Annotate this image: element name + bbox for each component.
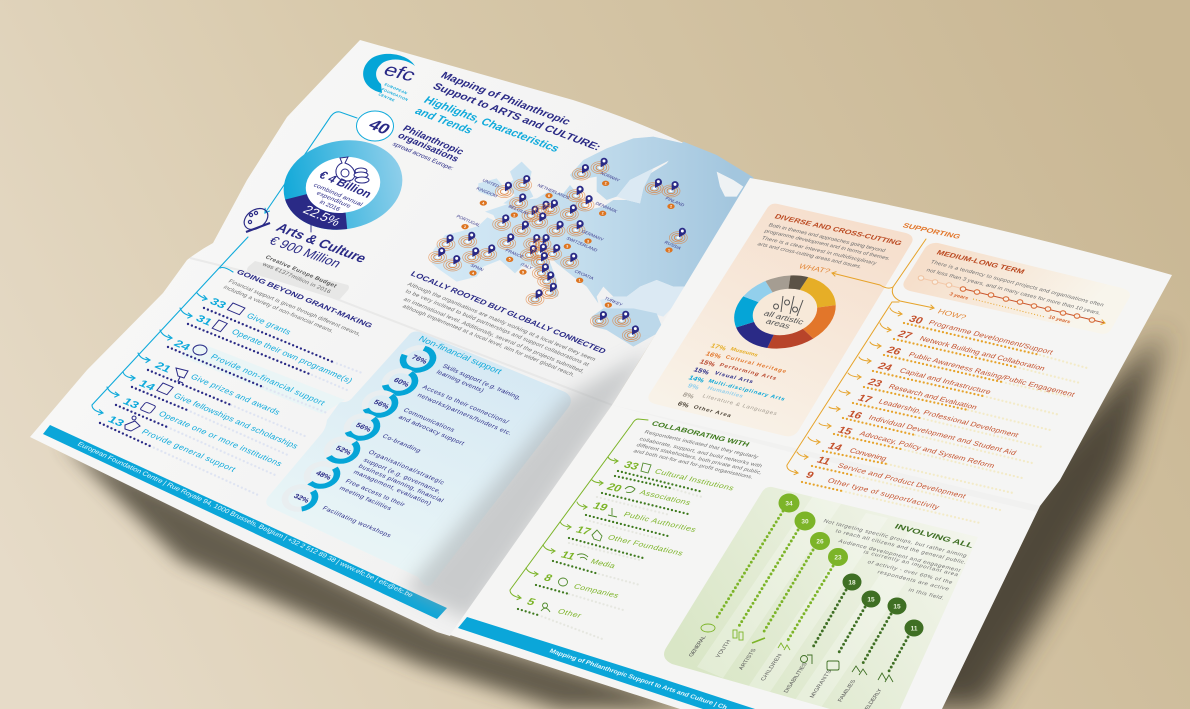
section: collaborating with: and both not-for and for-profit organisations.	[632, 449, 754, 481]
icon: sliders	[774, 296, 803, 316]
list item: 13 general support	[105, 414, 239, 474]
panel: involving all	[664, 487, 978, 709]
legend: artistic areas: Visual Arts	[713, 371, 754, 385]
stat: 40 organisations: organisations	[395, 131, 461, 164]
panel: non-financial support content: networks/partners/funders etc.	[416, 392, 513, 437]
panel: involving all: is currently an important area	[862, 550, 960, 578]
list: how items: Public Awareness Raising/Public Engagement	[907, 350, 1077, 399]
map country labels: CROATIA	[573, 269, 595, 281]
panel: involving all: of activity - over 60% of the	[866, 560, 953, 585]
map country labels: FINLAND	[664, 196, 686, 208]
icon: palette	[240, 204, 272, 234]
panel: non-financial support content: and advocacy support	[397, 414, 466, 447]
list: collaborating items: Media	[589, 557, 618, 570]
country count badges	[461, 181, 675, 308]
panel: non-financial support content: Organisational/strategic	[367, 449, 446, 486]
section: collaborating with: Respondents indicated that they regularly	[643, 430, 759, 460]
section: locally rooted: Although the organisations are mainly working at a local level they seem	[406, 282, 597, 363]
panel: non-financial support content: Non-financial support	[417, 334, 505, 376]
heading: supporting: SUPPORTING	[901, 221, 962, 241]
legend: artistic areas: Museums	[729, 347, 759, 358]
list: how items: 24	[875, 361, 895, 374]
section: locally rooted	[401, 270, 608, 378]
lollipop chart: audiences: 15	[893, 604, 901, 610]
list item: 13 institutions: 13	[120, 396, 141, 411]
list: collaborating items: Cultural Institutions	[653, 467, 736, 492]
donut: all artistic areas	[729, 274, 841, 350]
panel: non-financial support content: Communications	[402, 407, 456, 434]
panel: non-financial support content: Free access to their	[344, 478, 407, 508]
map country labels: FRANCE	[504, 248, 525, 259]
donut: 4 billion expenditure: € 4 Billion	[316, 169, 375, 200]
audience labels: MIGRANTS	[809, 670, 833, 698]
audience labels: YOUTH	[715, 640, 733, 658]
list: how items: Individual Development and Student Aid	[867, 413, 1018, 457]
list: collaborating items: 19	[590, 501, 610, 513]
lollipop chart: audiences: 34	[785, 500, 793, 508]
list: how items: Other type of support/activity	[826, 476, 941, 511]
stat: 40 organisations	[356, 111, 466, 172]
panel: medium-long term: 10 years	[1047, 315, 1071, 325]
list: how items: Programme Development/Support	[927, 318, 1056, 356]
stat: 40 organisations: Philanthropic	[400, 124, 466, 157]
small arrow	[310, 222, 312, 232]
legend: artistic areas: Humanities	[706, 386, 744, 399]
location pins	[429, 158, 687, 341]
map of europe: 2	[605, 182, 607, 186]
list item: 21 prizes	[152, 360, 282, 417]
panel: medium-long term: There is a tendency to support projects and organisations often	[929, 260, 1105, 308]
tinted strip behind list	[180, 343, 345, 414]
legend: artistic areas: 6%	[676, 400, 691, 409]
panel: involving all: Not targeting specific groups, but rather aiming	[822, 519, 968, 559]
legend: artistic areas: Other Area	[692, 405, 733, 419]
list: how items	[803, 314, 1077, 511]
map of europe: 2	[513, 213, 515, 217]
logo: efc: efc	[379, 60, 420, 86]
map of europe: 2	[602, 212, 604, 216]
audience labels: FAMILIES	[837, 679, 858, 702]
list: collaborating items: 17	[573, 525, 593, 537]
list item: 13 general support: Provide general support	[140, 427, 239, 474]
map of europe	[429, 137, 753, 347]
donut: 4 billion expenditure: combined annual	[312, 182, 364, 208]
list item: 13 institutions: Operate one or more institutions	[157, 409, 284, 468]
panel: non-financial support content: Facilitating workshops	[321, 505, 392, 539]
panel: non-financial support content: Co-branding	[381, 433, 422, 454]
list: collaborating items: 5	[524, 597, 538, 608]
panel: non-financial support content: support (e.g. governance,	[362, 457, 443, 495]
lollipop chart: audiences: 15	[867, 596, 875, 604]
paper shadows	[60, 330, 1165, 709]
map country labels: TURKEY	[603, 296, 624, 307]
footer band: left page	[43, 425, 447, 619]
panel: non-financial support content: meeting facilities	[338, 485, 393, 512]
list: collaborating items: Other	[556, 607, 583, 620]
panel: non-financial support content: 56%	[354, 421, 374, 434]
heading: arts and culture: Arts & Culture	[272, 221, 370, 266]
connector: supporting tree	[787, 239, 934, 473]
callout: creative europe budget: was €1377million in 2016	[260, 262, 332, 295]
audience labels: CHILDREN	[760, 654, 784, 681]
panel: non-financial support background	[266, 332, 571, 586]
lollipop chart: audiences: 30	[801, 518, 809, 526]
section: locally rooted: an international level. Additionally, several of the projects submitted,	[402, 297, 586, 375]
top connector with arrow	[265, 112, 357, 213]
legend: artistic areas: 15%	[698, 358, 717, 368]
list: how items: Advocacy, Policy and System Reform	[858, 429, 997, 470]
map of europe: 5	[509, 258, 511, 262]
logo: efc: EUROPEAN	[383, 83, 408, 95]
section: locally rooted: LOCALLY ROOTED BUT GLOBALLY CONNECTED	[409, 270, 608, 355]
list: how items: 30	[906, 314, 925, 326]
connector trunk: grant-making	[92, 237, 248, 413]
icons: collaborators	[541, 463, 651, 612]
icons: audiences	[701, 624, 790, 650]
map of europe: 3	[587, 239, 589, 243]
lollipop chart: audiences: 23	[834, 554, 842, 562]
logo: efc: FOUNDATION	[380, 88, 409, 102]
section: collaborating with	[632, 419, 763, 481]
map country labels: NORWAY	[599, 171, 621, 183]
audience labels: GENERAL	[688, 635, 708, 657]
legend: artistic areas	[676, 342, 787, 419]
panel: diverse and cross-cutting	[648, 204, 913, 436]
panel: medium-long term: 3 years	[948, 292, 970, 301]
audience labels	[688, 635, 884, 709]
stat: 40 organisations: spread across Europe:	[391, 141, 455, 172]
list item: 21 prizes: 21	[152, 360, 173, 375]
title: Mapping of Philanthropic	[438, 70, 573, 127]
list item: 33 give grants: Give grants	[245, 311, 293, 336]
map country labels: PORTUGAL	[455, 214, 482, 228]
list: how items: 27	[895, 329, 914, 341]
list item: 14 fellowships: Give fellowships and scholarships	[172, 391, 300, 450]
donut: 4 billion expenditure: in 2016	[318, 199, 342, 213]
list: how items: 16	[845, 409, 864, 421]
panel: involving all: to reach all citizens and the general public.	[834, 529, 967, 566]
map country labels: BELGIUM	[507, 204, 530, 216]
map of europe: 3	[566, 245, 568, 249]
donut: 4 billion expenditure: 22.5%	[300, 203, 344, 229]
list item: 24 non-financial support: 24	[171, 338, 192, 353]
donut: 4 billion expenditure: expenditure	[315, 190, 353, 210]
lollipop chart: audiences: 26	[816, 538, 824, 546]
map country labels: RUSSIA	[663, 240, 682, 250]
list item: 14 fellowships: 14	[136, 378, 157, 393]
legend: artistic areas: Cultural Heritage	[724, 355, 787, 374]
panel: involving all: Audience development and engagement	[837, 539, 962, 574]
panel: non-financial support content: 32%	[292, 492, 312, 505]
map country labels: SPAIN	[469, 263, 485, 272]
map country labels: SWITZERLAND	[565, 236, 599, 253]
lollipop chart: audiences: 11	[911, 626, 918, 632]
list item: 31 operate programmes: 31	[193, 313, 214, 328]
section: collaborating with: COLLABORATING WITH	[650, 419, 751, 448]
list item: 24 non-financial support: Provide non-financial support	[209, 352, 328, 407]
panel: involving all: INVOLVING ALL	[893, 522, 975, 550]
panel: involving all: in this field.	[907, 588, 945, 601]
list: collaborating items: 20	[604, 482, 624, 494]
map country labels: DENMARK	[594, 201, 619, 214]
panel: non-financial support content: 56%	[372, 398, 392, 411]
list: collaborating items: Companies	[572, 582, 621, 599]
connector: collaborating	[510, 419, 648, 598]
legend: artistic areas: Literature & Languages	[701, 394, 778, 417]
panel: diverse and cross-cutting: There is a clear interest in multidisciplinary	[760, 236, 878, 266]
lollipop chart: audiences	[716, 494, 924, 671]
list: grant-making dot rows	[100, 308, 362, 495]
section: collaborating with: different stakeholders, both private and public,	[635, 443, 763, 476]
map country labels: KINGDOM	[475, 186, 499, 198]
list: how items: 9	[803, 470, 816, 481]
legend: artistic areas: 9%	[686, 382, 701, 391]
list: how items: Network Building and Collaboration	[918, 334, 1047, 372]
icon: money bag	[336, 157, 369, 183]
list: how items: 23	[865, 377, 884, 389]
map country labels: ITALY	[519, 262, 534, 270]
map country labels	[455, 171, 686, 307]
panel: medium-long term: not less than 3 years, and in many cases for more than 10 years.	[925, 268, 1102, 317]
legend: artistic areas: Performing Arts	[718, 363, 777, 381]
list: how items: 26	[884, 345, 903, 357]
list: how items: 17	[855, 393, 874, 405]
panel: non-financial support content: 60%	[392, 376, 412, 389]
list: collaborating items	[524, 460, 736, 620]
list: how items: 14	[825, 441, 845, 454]
footer band: left page: European Foundation Centre | Rue Royale 94, 1000 Brussels, Belgium | +32 2 512 89 38 | www.efc.be | efc@efc.be	[76, 441, 414, 599]
legend: artistic areas: 15%	[692, 366, 711, 376]
map of europe: 4	[482, 201, 485, 205]
list: how items: 11	[814, 455, 833, 467]
list: collaborating items: 33	[621, 460, 641, 472]
map of europe: 3	[607, 303, 609, 307]
list: how items: Research and Evaluation	[887, 382, 979, 411]
map of europe: 1	[668, 248, 670, 252]
land masses	[432, 137, 753, 305]
legend: artistic areas: Multi-disciplinary Arts	[707, 379, 786, 402]
map of europe: 6	[548, 194, 550, 198]
map country labels: NETHERLANDS	[536, 183, 571, 200]
list item: 31 operate programmes	[193, 313, 355, 385]
list: collaborating items: 8	[541, 573, 554, 584]
map of europe: 1	[579, 279, 581, 283]
panel: diverse and cross-cutting: DIVERSE AND CROSS-CUTTING	[773, 212, 904, 247]
panel: diverse and cross-cutting: arts and cross-cutting areas and issues.	[756, 242, 863, 270]
list: how items: Convening	[848, 446, 889, 462]
panel: diverse and cross-cutting: all artistic	[762, 309, 807, 326]
list: how items: Capital and Infrastructure	[898, 366, 993, 396]
section: collaborating with: collaborate, support, and build networks with	[638, 437, 763, 469]
panel: non-financial support content: 52%	[334, 444, 354, 457]
panel stripes	[697, 505, 878, 706]
list: how dot rows	[802, 323, 1087, 523]
legend: artistic areas: 8%	[681, 391, 696, 400]
text: HOW?	[936, 307, 968, 321]
spine shading	[405, 350, 652, 620]
right page	[450, 178, 1172, 709]
list item: 24 non-financial support	[171, 338, 328, 407]
section: going beyond grant-making: GOING BEYOND GRANT-MAKING	[235, 268, 375, 330]
map of europe: 2	[464, 225, 466, 229]
section: going beyond grant-making: including a variety of non-financial means.	[222, 285, 335, 334]
left page	[30, 40, 752, 636]
list item: 14 fellowships	[136, 378, 300, 450]
panel: non-financial support content: management, evaluation)	[352, 469, 433, 507]
panel: diverse and cross-cutting: Both in themes and approaches going beyond	[767, 223, 886, 254]
logo: efc	[363, 54, 420, 103]
audience labels: ARTISTS	[738, 648, 758, 670]
panel: medium-long term: MEDIUM-LONG TERM	[935, 248, 1026, 276]
list: collaborating items: 11	[558, 550, 578, 562]
panel: non-financial support content: 76%	[410, 353, 430, 366]
list item: 13 institutions	[120, 396, 284, 468]
panel: diverse and cross-cutting: programme development and in terms of themes.	[763, 229, 892, 262]
section: locally rooted: although implemented at a local level, aim for wider global reach.	[401, 304, 576, 378]
list item: 33 give grants	[207, 296, 293, 336]
legend: artistic areas: 17%	[709, 342, 728, 352]
stat: 40 organisations: 40	[365, 116, 394, 138]
logo: efc: CENTRE	[377, 93, 396, 103]
callout: creative europe budget	[247, 255, 349, 300]
section: going beyond grant-making: Financial support is given through different means,	[227, 279, 362, 338]
list item: 31 operate programmes: Operate their own programme(s)	[230, 327, 355, 385]
percent rings	[272, 341, 442, 518]
panel: diverse and cross-cutting: WHAT?	[797, 262, 833, 275]
title: and Trends	[412, 105, 476, 136]
map of europe: 4	[472, 271, 475, 275]
list: how items: Leadership, Professional Development	[877, 397, 1021, 439]
panel: non-financial support content	[272, 334, 523, 539]
panel: non-financial support content: Access to their connections/	[421, 384, 510, 425]
panel: non-financial support content: learning events)	[435, 369, 485, 394]
list item: 21 prizes: Give prizes and awards	[189, 372, 282, 417]
audience labels: DISABILITIES	[783, 662, 809, 693]
panel: involving all: respondents are active	[876, 570, 950, 592]
list: collaborating items: Other Foundations	[606, 533, 685, 557]
footer band: right page	[458, 617, 755, 709]
title: Highlights, Characteristics	[421, 94, 562, 155]
donut: 4 billion expenditure	[249, 116, 437, 254]
map country labels: UNITED	[481, 178, 501, 189]
heading: arts and culture: € 900 Million	[266, 234, 344, 270]
map of europe: 9	[522, 270, 524, 274]
panel: medium-long term	[903, 243, 1130, 334]
panel: non-financial support content: business planning, financial	[357, 463, 445, 504]
legend: artistic areas: 14%	[687, 374, 706, 384]
title: Support to ARTS and CULTURE:	[430, 81, 603, 153]
timeline: years	[918, 276, 1105, 323]
callout: creative europe budget: Creative Europe Budget	[264, 255, 337, 289]
section: locally rooted: to be very inclined to build partnerships and support collaborations at	[404, 289, 590, 368]
list item: 13 general support: 13	[105, 414, 126, 429]
panel: diverse and cross-cutting: areas	[764, 317, 792, 330]
list: how items: Service and Product Development	[836, 461, 969, 500]
panel: non-financial support content: Skills support (e.g. training,	[441, 363, 523, 401]
lollipop chart: audiences: 18	[848, 580, 856, 586]
list: collaborating items: Associations	[638, 488, 692, 507]
list: how items: 15	[835, 425, 854, 437]
map country labels: GERMANY	[580, 229, 605, 242]
list: collaborating items: Public Authorities	[622, 510, 698, 534]
map of europe: 2	[670, 205, 672, 209]
list: collaborating dot rows	[518, 471, 703, 640]
legend: artistic areas: 16%	[704, 350, 723, 360]
panel: non-financial support content: 48%	[314, 469, 334, 482]
list item: 33 give grants: 33	[207, 296, 228, 311]
